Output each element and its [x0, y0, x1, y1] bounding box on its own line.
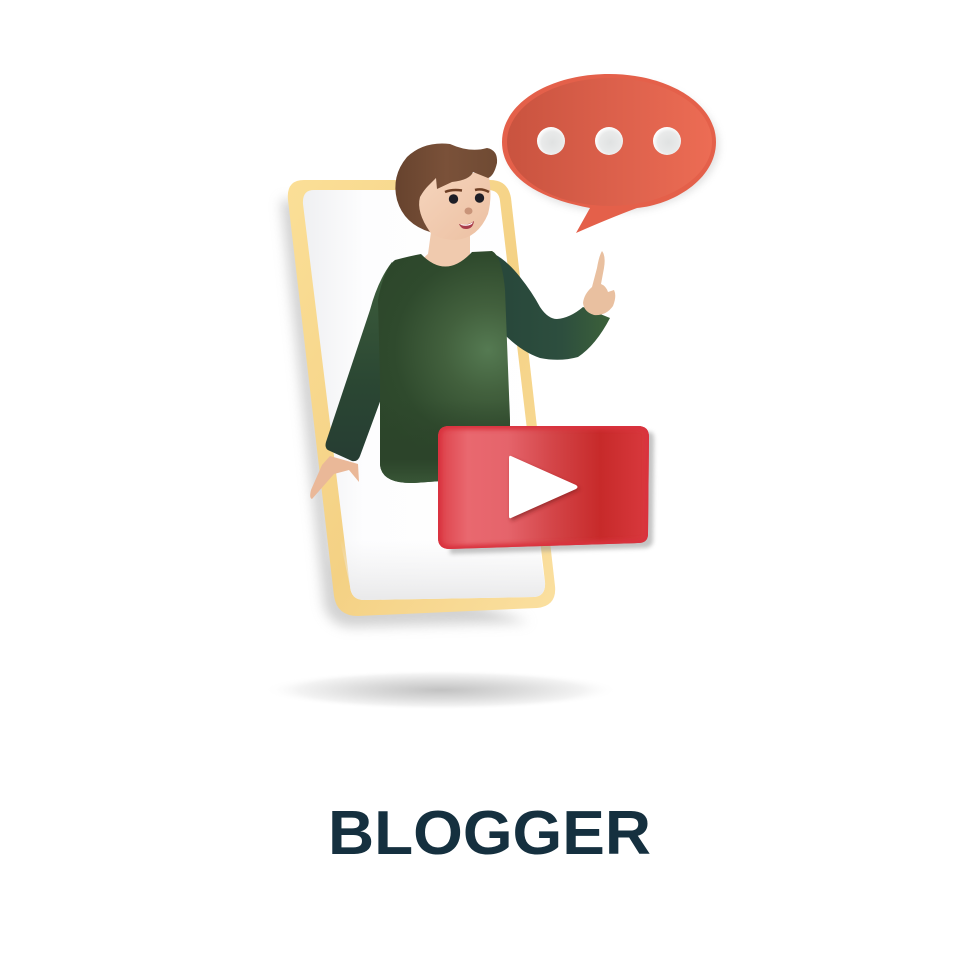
phone screen bottom shade [340, 540, 545, 600]
title: BLOGGER [328, 799, 651, 868]
phone drop shadow [281, 200, 530, 627]
right arm sleeve [490, 252, 610, 360]
hair [395, 144, 497, 232]
neck [420, 232, 474, 270]
left hand [310, 456, 359, 499]
left arm sleeve [326, 262, 395, 461]
phone frame [288, 180, 555, 616]
video play badge [438, 426, 654, 554]
bubble dots [537, 127, 681, 155]
badge body [438, 426, 649, 549]
eyebrows [445, 189, 489, 192]
speech bubble [502, 74, 719, 233]
badge shadow [448, 432, 654, 554]
nose [464, 208, 472, 214]
right eye [475, 193, 484, 203]
sweater body [378, 251, 510, 483]
left eye [449, 194, 458, 204]
bubble shadow [507, 80, 719, 212]
floor shadow [263, 670, 619, 710]
phone [281, 180, 555, 627]
bubble fill [507, 78, 712, 206]
mouth [459, 221, 474, 229]
play triangle [509, 456, 578, 518]
play shadow [511, 458, 580, 521]
person [310, 144, 615, 499]
badge soft edge [438, 426, 649, 549]
infographic canvas [277, 74, 721, 854]
raised hand [583, 251, 615, 315]
face [418, 172, 490, 240]
head [395, 144, 497, 240]
bubble outline [502, 74, 716, 233]
phone screen [303, 190, 545, 600]
